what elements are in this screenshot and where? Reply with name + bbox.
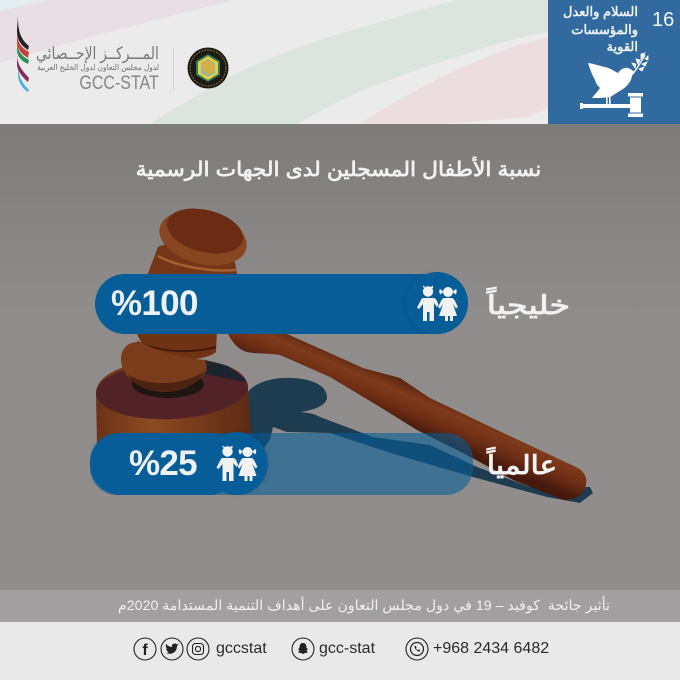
handle — [228, 334, 586, 500]
logo: GCC-STAT — [17, 16, 228, 94]
bar: Gulf 100% — [95, 274, 467, 334]
value: 25%: %25 — [129, 444, 197, 483]
icon: children — [205, 432, 268, 495]
footer strip: source — [0, 590, 680, 622]
icon: dove and gavel — [580, 52, 648, 117]
SDG title: السلام والعدل — [563, 4, 638, 19]
icon: GCC emblem — [188, 48, 228, 88]
source text: تأثير جائحة كوفيد – 19 في دول مجلس التعاون على أهداف التنمية المستدامة 2020م — [118, 598, 610, 614]
logo text arabic: المـــركــز الإحــصائي — [36, 44, 159, 63]
bar: global 25% fill — [90, 433, 240, 495]
bar: global 25% track — [90, 433, 473, 495]
icon: whatsapp — [405, 638, 429, 660]
panel: SDG 16 badge — [548, 0, 680, 128]
icon: facebook — [133, 638, 157, 660]
label: Gulf: خليجياً — [487, 290, 570, 320]
SDG title: القوية — [607, 39, 638, 54]
phone number: +968 2434 6482 — [433, 640, 549, 657]
illustration: gavel — [0, 124, 680, 590]
handle: gccstat: gccstat — [216, 640, 267, 657]
value: 100%: %100 — [111, 284, 198, 323]
SDG title — [563, 4, 638, 54]
icon: snapchat — [291, 638, 315, 660]
header background — [0, 0, 548, 124]
gavel shadow — [240, 378, 593, 503]
icon: children — [406, 272, 468, 334]
icon: facebook: f — [142, 642, 148, 659]
icon: twitter — [160, 638, 184, 660]
panel: photo background — [0, 124, 680, 590]
gavel head — [147, 245, 238, 280]
icon: ribbon logo mark — [17, 16, 29, 92]
SDG number: 16 — [652, 9, 674, 31]
logo text GCC-STAT: GCC-STAT — [80, 72, 159, 94]
logo subtitle arabic: لدول مجلس التعاون لدول الخليج العربية — [37, 63, 159, 72]
heading: نسبة الأطفال المسجلين لدى الجهات الرسمية — [136, 159, 541, 181]
label: global: عالمياً — [487, 450, 557, 480]
SDG title: والمؤسسات — [571, 22, 638, 36]
icon: instagram — [186, 638, 210, 660]
footer: contact row — [133, 638, 549, 660]
sound block — [96, 358, 252, 445]
handle: gcc-stat: gcc-stat — [319, 640, 375, 657]
